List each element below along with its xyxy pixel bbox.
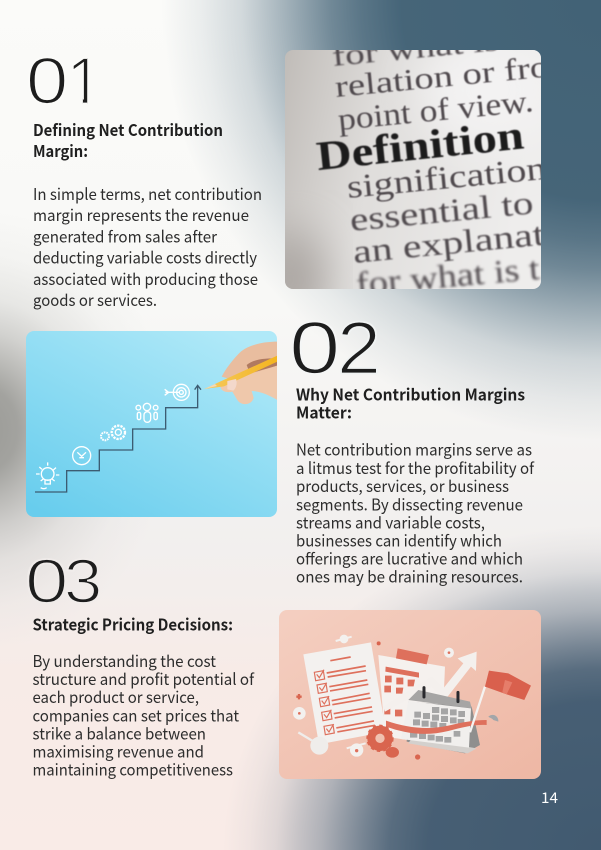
cog and small ornaments [371,730,389,747]
section 1 body: margin represents the revenue [33,202,249,226]
section 3 body: By understanding the cost [32,648,216,672]
section 3 heading: Strategic Pricing Decisions: [32,612,233,636]
illustration: paper checklist and calendar [279,610,541,779]
section 2 body: offerings are lucrative and which [296,546,523,570]
section 3 body: maximising revenue and [32,738,204,762]
section 1 body: goods or services. [33,287,157,311]
photo: dictionary definition page: point of view. [336,82,535,137]
section 3 body [32,648,255,781]
step icons [36,384,189,489]
section 1 heading: Defining Net Contribution [33,117,223,141]
section 2 heading: Why Net Contribution Margins [296,382,525,406]
photo: dictionary definition page: an explanat [351,217,546,271]
section 2 body: a litmus test for the profitability of [296,455,535,479]
photo: dictionary definition page: relation or from [333,46,581,104]
stairs line [35,385,201,492]
photo: dictionary definition page: Definition [314,111,526,179]
section 2 body: businesses can identify which [296,528,502,552]
photo: dictionary definition page: for what is the [331,19,558,73]
section 2 body [296,437,535,588]
photo: dictionary definition page: for what is t [355,251,541,303]
section 2 body: products, services, or business [296,473,509,497]
photo: dictionary definition page: essential to [348,185,535,239]
number 03: 0 [25,546,68,616]
photo: dictionary definition page [285,50,541,289]
section 1 body: In simple terms, net contribution [33,181,262,205]
section 1 body: deducting variable costs directly [33,245,258,269]
number 02: 2 [337,308,381,390]
number 01: 0 [26,45,68,118]
section 3 body: maintaining competitiveness [32,757,233,781]
section 1 body: associated with producing those [33,266,258,290]
section 1 body: generated from sales after [33,223,218,247]
section 2 body: Net contribution margins serve as [296,437,532,461]
rising arrow [383,652,477,712]
hand and pencil [204,342,277,404]
number 03 [25,546,102,616]
number 03: 3 [64,546,102,616]
number 01: 1 [66,45,103,118]
section 2 body: segments. By dissecting revenue [296,491,523,515]
number 01 [30,58,88,104]
section 2 heading: Matter: [296,400,352,424]
section 2 body: ones may be draining resources. [296,564,523,588]
ribbon [386,720,487,734]
photo: hand drawing a staircase [26,331,277,517]
section 3 body: structure and profit potential of [32,666,255,690]
desk calendar [407,702,480,753]
section 3 body: companies can set prices that [32,702,239,726]
section 3 body: strike a balance between [32,720,206,744]
back planner [378,655,445,745]
number 02 [289,306,381,390]
checklist paper [303,642,386,744]
section 3 body: each product or service, [32,684,199,708]
page number: 14 [541,787,558,808]
section 2 body: streams and variable costs, [296,509,485,533]
flag [470,687,485,732]
number 02: 0 [289,306,340,390]
photo: dictionary definition page: signification [345,151,548,206]
section 1 heading: Margin: [33,138,88,162]
section 1 heading [33,117,223,162]
section 1 body [33,181,262,311]
section 2 heading [296,382,525,424]
